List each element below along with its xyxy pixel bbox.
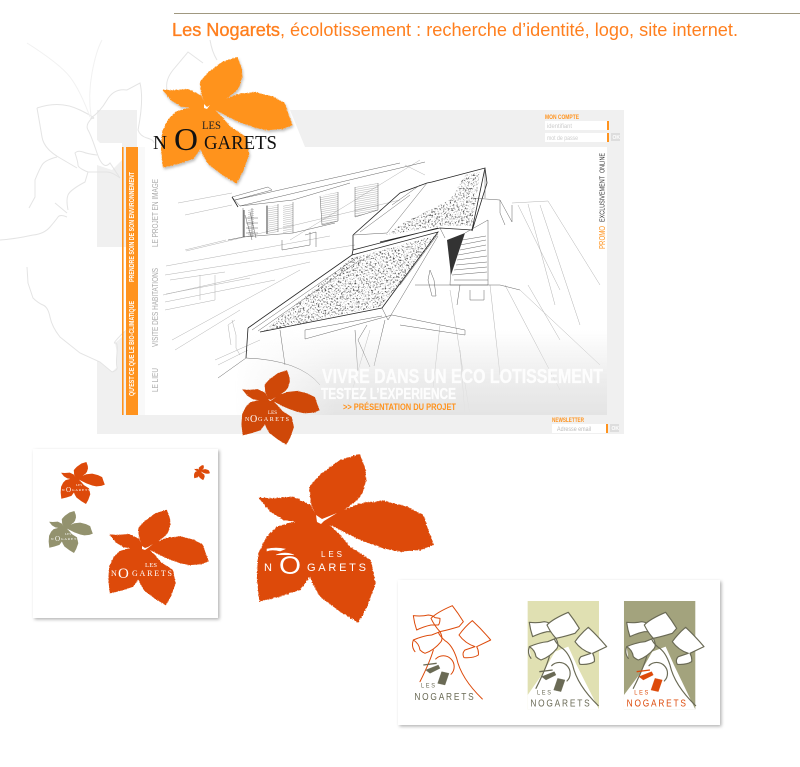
headline <box>321 366 603 403</box>
logo: small leaf on website: LES <box>268 411 277 416</box>
logo variant: olive: NOGARETS <box>627 697 686 709</box>
logo: large orange-red leaf: N <box>264 562 272 574</box>
logo variant: pale green <box>528 601 607 709</box>
logo sketch: red outline: LES <box>421 682 435 690</box>
side menu: LE LIEU <box>150 368 160 392</box>
side menu <box>150 179 160 392</box>
decorative embossed leaves <box>0 40 217 372</box>
logo variant: pale green: LES <box>537 689 551 696</box>
logo: olive leaf: LES <box>65 532 71 536</box>
promo strip: ONLINE <box>600 153 606 173</box>
logo: olive leaf <box>49 511 93 553</box>
logo: red leaf small <box>61 462 105 504</box>
architectural sketch <box>163 160 600 415</box>
logo: orange leaf header: N <box>153 132 167 154</box>
project link: >> PRÉSENTATION DU PROJET <box>343 402 456 413</box>
logo variant: pale green: NOGARETS <box>530 697 590 709</box>
logo: red leaf small: GARETS <box>72 488 90 492</box>
logo sketch: red outline: NOGARETS <box>414 690 474 702</box>
logo sketch: red outline <box>412 606 491 702</box>
logo: orange leaf header <box>153 57 293 184</box>
promo strip: EXCLUSIVEMENT <box>600 175 606 222</box>
headline: TESTEZ L’EXPERIENCE <box>321 386 456 403</box>
side menu: LE PROJET EN IMAGE <box>150 179 160 247</box>
nav label: PRENDRE SOIN DE SON ENVIRONNEMENT <box>129 171 136 282</box>
website grey frame <box>97 110 624 434</box>
logo: red leaf small: O <box>66 486 71 494</box>
sidebar <box>138 147 145 415</box>
logo variant: olive <box>624 601 704 709</box>
logo: large orange-red leaf: GARETS <box>307 562 366 574</box>
headline: VIVRE DANS UN ECO LOTISSEMENT <box>322 366 603 388</box>
logo: orange leaf header: LES <box>202 118 221 132</box>
newsletter form: OK <box>612 426 619 432</box>
logo: red leaf medium: LES <box>145 562 157 569</box>
account form: mot de passe <box>547 136 579 142</box>
logo wordmark: LES <box>321 550 342 559</box>
panel: leaf logo variants <box>33 449 218 618</box>
promo strip <box>595 148 607 253</box>
navigation bar <box>122 147 138 415</box>
account form: identifiant <box>547 124 572 130</box>
account form: MON COMPTE <box>545 114 580 121</box>
logo: red leaf medium: O <box>118 566 129 582</box>
logo: large orange-red leaf: O <box>279 552 301 580</box>
panel background <box>398 580 720 725</box>
logo: red leaf small: LES <box>76 483 82 487</box>
logo: red leaf medium <box>108 510 209 605</box>
logo: olive leaf: N <box>51 537 54 541</box>
logo: red leaf medium: N <box>111 569 117 578</box>
panel: website mockup <box>0 40 624 434</box>
logo: large orange-red leaf <box>257 454 434 623</box>
sketch bottom fade <box>256 336 607 415</box>
logo variant: olive: LES <box>634 689 648 696</box>
logo: red leaf medium: GARETS <box>132 569 172 578</box>
account form: OK <box>612 135 620 141</box>
logo: orange leaf header: O <box>174 121 198 157</box>
logo: small leaf on website: O <box>250 414 257 425</box>
title: Les Nogarets, écolotissement : recherche d’identité, logo, site internet. <box>172 20 738 40</box>
title rule <box>174 13 800 14</box>
side menu: VISITE DES HABITATIONS <box>150 268 160 347</box>
account form <box>545 114 620 142</box>
windows hatch <box>248 183 378 237</box>
panel: drawn logo variants <box>398 580 720 725</box>
newsletter form: Adresse email <box>557 427 591 433</box>
newsletter form <box>552 417 619 433</box>
logo: orange leaf header: GARETS <box>204 132 277 154</box>
sketch area <box>138 147 607 415</box>
logo: olive leaf: GARETS <box>61 537 79 541</box>
logo: olive leaf: O <box>55 535 60 543</box>
logo: small leaf on website <box>241 370 320 445</box>
nav label: QU'EST CE QUE LE BIO-CLIMATIQUE <box>129 301 136 396</box>
logo: red leaf tiny <box>194 465 210 480</box>
logo: small leaf on website: GARETS <box>258 417 289 423</box>
newsletter form: NEWSLETTER <box>552 417 584 424</box>
logo: small leaf on website: N <box>245 417 250 423</box>
card background <box>33 449 218 618</box>
promo strip: PROMO <box>598 226 607 249</box>
logo: red leaf small: N <box>62 488 65 492</box>
roof texture <box>262 172 480 332</box>
